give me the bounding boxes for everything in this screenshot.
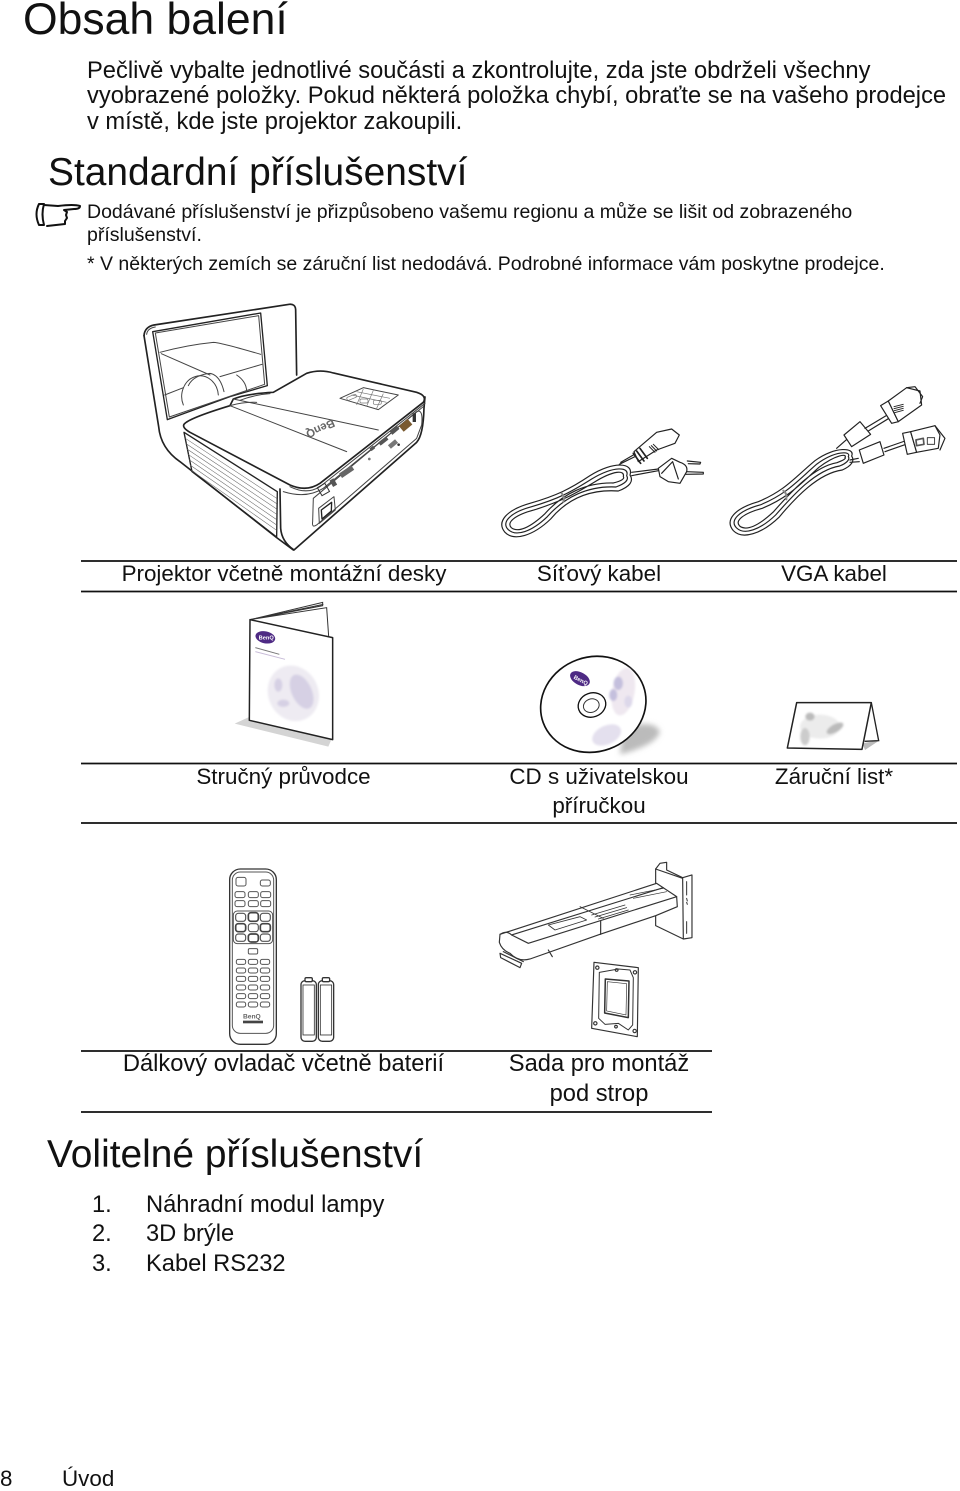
table row 3 rules [81,1051,712,1112]
illustration: projector: BenQ [304,416,336,440]
heading: standard accessories: Standardní příslušenství [48,151,468,194]
footer: page number: Úvod [62,1466,114,1491]
illustration: CD: BenQ [572,675,589,687]
note text: příslušenství. [87,224,202,246]
label: warranty card: Záruční list* [775,764,893,789]
label: mount kit [509,1051,689,1107]
note text [87,201,885,275]
intro paragraph: Pečlivě vybalte jednotlivé součásti a zkontrolujte, zda jste obdrželi všechny [87,58,871,84]
list: optional accessories: 3D brýle [146,1221,234,1247]
intro paragraph: vyobrazené položky. Pokud některá položka chybí, obraťte se na vašeho prodejce [87,83,946,109]
illustration: quick guide booklet: BenQ [259,635,274,641]
footer: page number [0,1466,114,1491]
illustration: remote control [230,869,276,1044]
list: optional accessories [92,1192,384,1277]
label: remote control: Dálkový ovladač včetně baterií [123,1051,445,1077]
illustration: ceiling plate [592,962,638,1037]
list: optional accessories: Náhradní modul lampy [146,1192,384,1218]
intro paragraph: v místě, kde jste projektor zakoupili. [87,109,462,135]
illustration: power cable [502,429,703,537]
label: CD: příručkou [552,793,646,818]
label: projector: Projektor včetně montážní desky [122,561,447,586]
illustration: remote control: BenQ [243,1014,261,1021]
note text: Dodávané příslušenství je přizpůsobeno vašemu regionu a může se lišit od zobrazeného [87,201,852,223]
list: optional accessories: 1. [92,1192,112,1218]
illustration: batteries [301,978,334,1041]
illustration: CD [527,642,660,767]
intro paragraph [87,58,946,135]
note text: * V některých zemích se záruční list nedodává. Podrobné informace vám poskytne prodejce. [87,253,885,275]
illustration: VGA cable [730,387,945,535]
illustration: warranty card [787,703,880,750]
table row 2 rules [81,764,957,823]
illustration: wall mount arm [499,862,692,968]
label: mount kit: pod strop [550,1081,648,1107]
label: VGA cable: VGA kabel [781,561,887,586]
footer: page number: 8 [0,1466,12,1491]
heading: optional accessories: Volitelné příslušenství [47,1133,423,1176]
list: optional accessories: 2. [92,1221,112,1247]
illustration: projector [144,304,425,550]
list: optional accessories: Kabel RS232 [146,1251,286,1277]
label: CD [509,764,689,818]
label: power cable: Síťový kabel [537,561,661,586]
illustration: quick guide booklet [235,602,333,747]
label: quick guide: Stručný průvodce [196,764,371,789]
list: optional accessories: 3. [92,1251,112,1277]
icon: pointing hand [36,204,80,226]
table row 1 rules [81,561,957,592]
label: CD: CD s uživatelskou [509,764,689,789]
label: mount kit: Sada pro montáž [509,1051,689,1077]
